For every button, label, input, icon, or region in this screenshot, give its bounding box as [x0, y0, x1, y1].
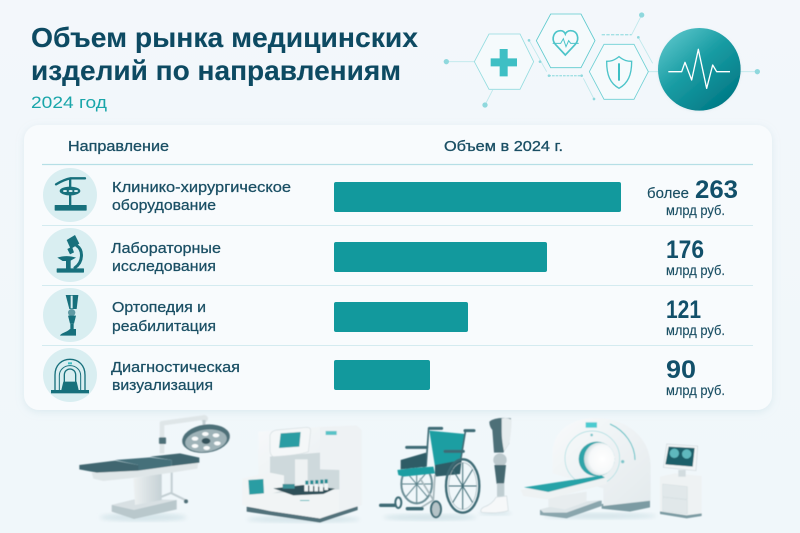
- value: более 263: млрд руб.: [666, 203, 725, 218]
- row: clinical and surgical equipment: [43, 168, 738, 222]
- table header: Направление: [68, 139, 169, 155]
- row: orthopedics and rehabilitation: [43, 288, 725, 342]
- value: 90: 90: [666, 356, 696, 384]
- value: 176: млрд руб.: [666, 263, 725, 278]
- value: 121: [666, 296, 725, 338]
- label: [111, 241, 221, 275]
- label: визуализация: [112, 378, 213, 394]
- label: Ортопедия и: [112, 300, 206, 316]
- value: более 263: более: [647, 186, 689, 202]
- table header: Объем в 2024 г.: [444, 139, 563, 155]
- label: реабилитация: [112, 319, 216, 335]
- label: [112, 300, 216, 335]
- icon: medical cross hexagon: [474, 34, 534, 89]
- label: [112, 180, 291, 214]
- value: 121: млрд руб.: [666, 323, 725, 338]
- bar: 121: [334, 302, 468, 332]
- title: изделий по направлениям: [31, 55, 401, 86]
- equipment: prosthetic leg: [478, 418, 512, 515]
- value: 90: [666, 356, 725, 398]
- value: более 263: [647, 176, 738, 218]
- table header: [68, 139, 563, 155]
- label: Лабораторные: [111, 241, 221, 257]
- label: Диагностическая: [111, 360, 240, 376]
- equipment: CT control console: [660, 444, 702, 518]
- label: Клинико-хирургическое: [112, 180, 291, 196]
- value: более 263: 263: [695, 176, 738, 204]
- label: исследования: [112, 259, 216, 275]
- value: 121: 121: [666, 296, 701, 324]
- title: Объем рынка медицинских: [31, 22, 418, 53]
- title block: [31, 22, 418, 112]
- icon: heart with pulse hexagon: [536, 14, 595, 68]
- icon: shield hexagon: [589, 44, 648, 99]
- icon: prosthetic leg: [43, 288, 97, 342]
- label: оборудование: [112, 198, 216, 214]
- bar: 90: [334, 360, 430, 390]
- icon: surgical lamp: [43, 168, 97, 222]
- equipment: surgical table with lamp: [79, 415, 232, 521]
- main table panel: [24, 125, 772, 410]
- equipment: laboratory analyzer: [242, 425, 362, 523]
- connector lines: [444, 12, 760, 108]
- icon: MRI scanner: [43, 348, 97, 402]
- value: 176: 176: [666, 236, 704, 264]
- icon: microscope: [43, 228, 97, 282]
- equipment: wheelchair: [381, 428, 479, 521]
- subtitle: year: 2024 год: [31, 93, 107, 112]
- bar: 176: [334, 242, 547, 272]
- row: laboratory research: [43, 228, 725, 282]
- bar: 263: [334, 182, 621, 212]
- equipment: CT scanner: [521, 418, 657, 519]
- value: 176: [666, 236, 725, 278]
- decorative hexagon icon cluster: [444, 12, 760, 111]
- icon: heartbeat disc: [658, 28, 741, 111]
- value: 90: млрд руб.: [666, 383, 725, 398]
- row: diagnostic imaging: [43, 348, 725, 402]
- label: [111, 360, 240, 394]
- title: [31, 22, 418, 86]
